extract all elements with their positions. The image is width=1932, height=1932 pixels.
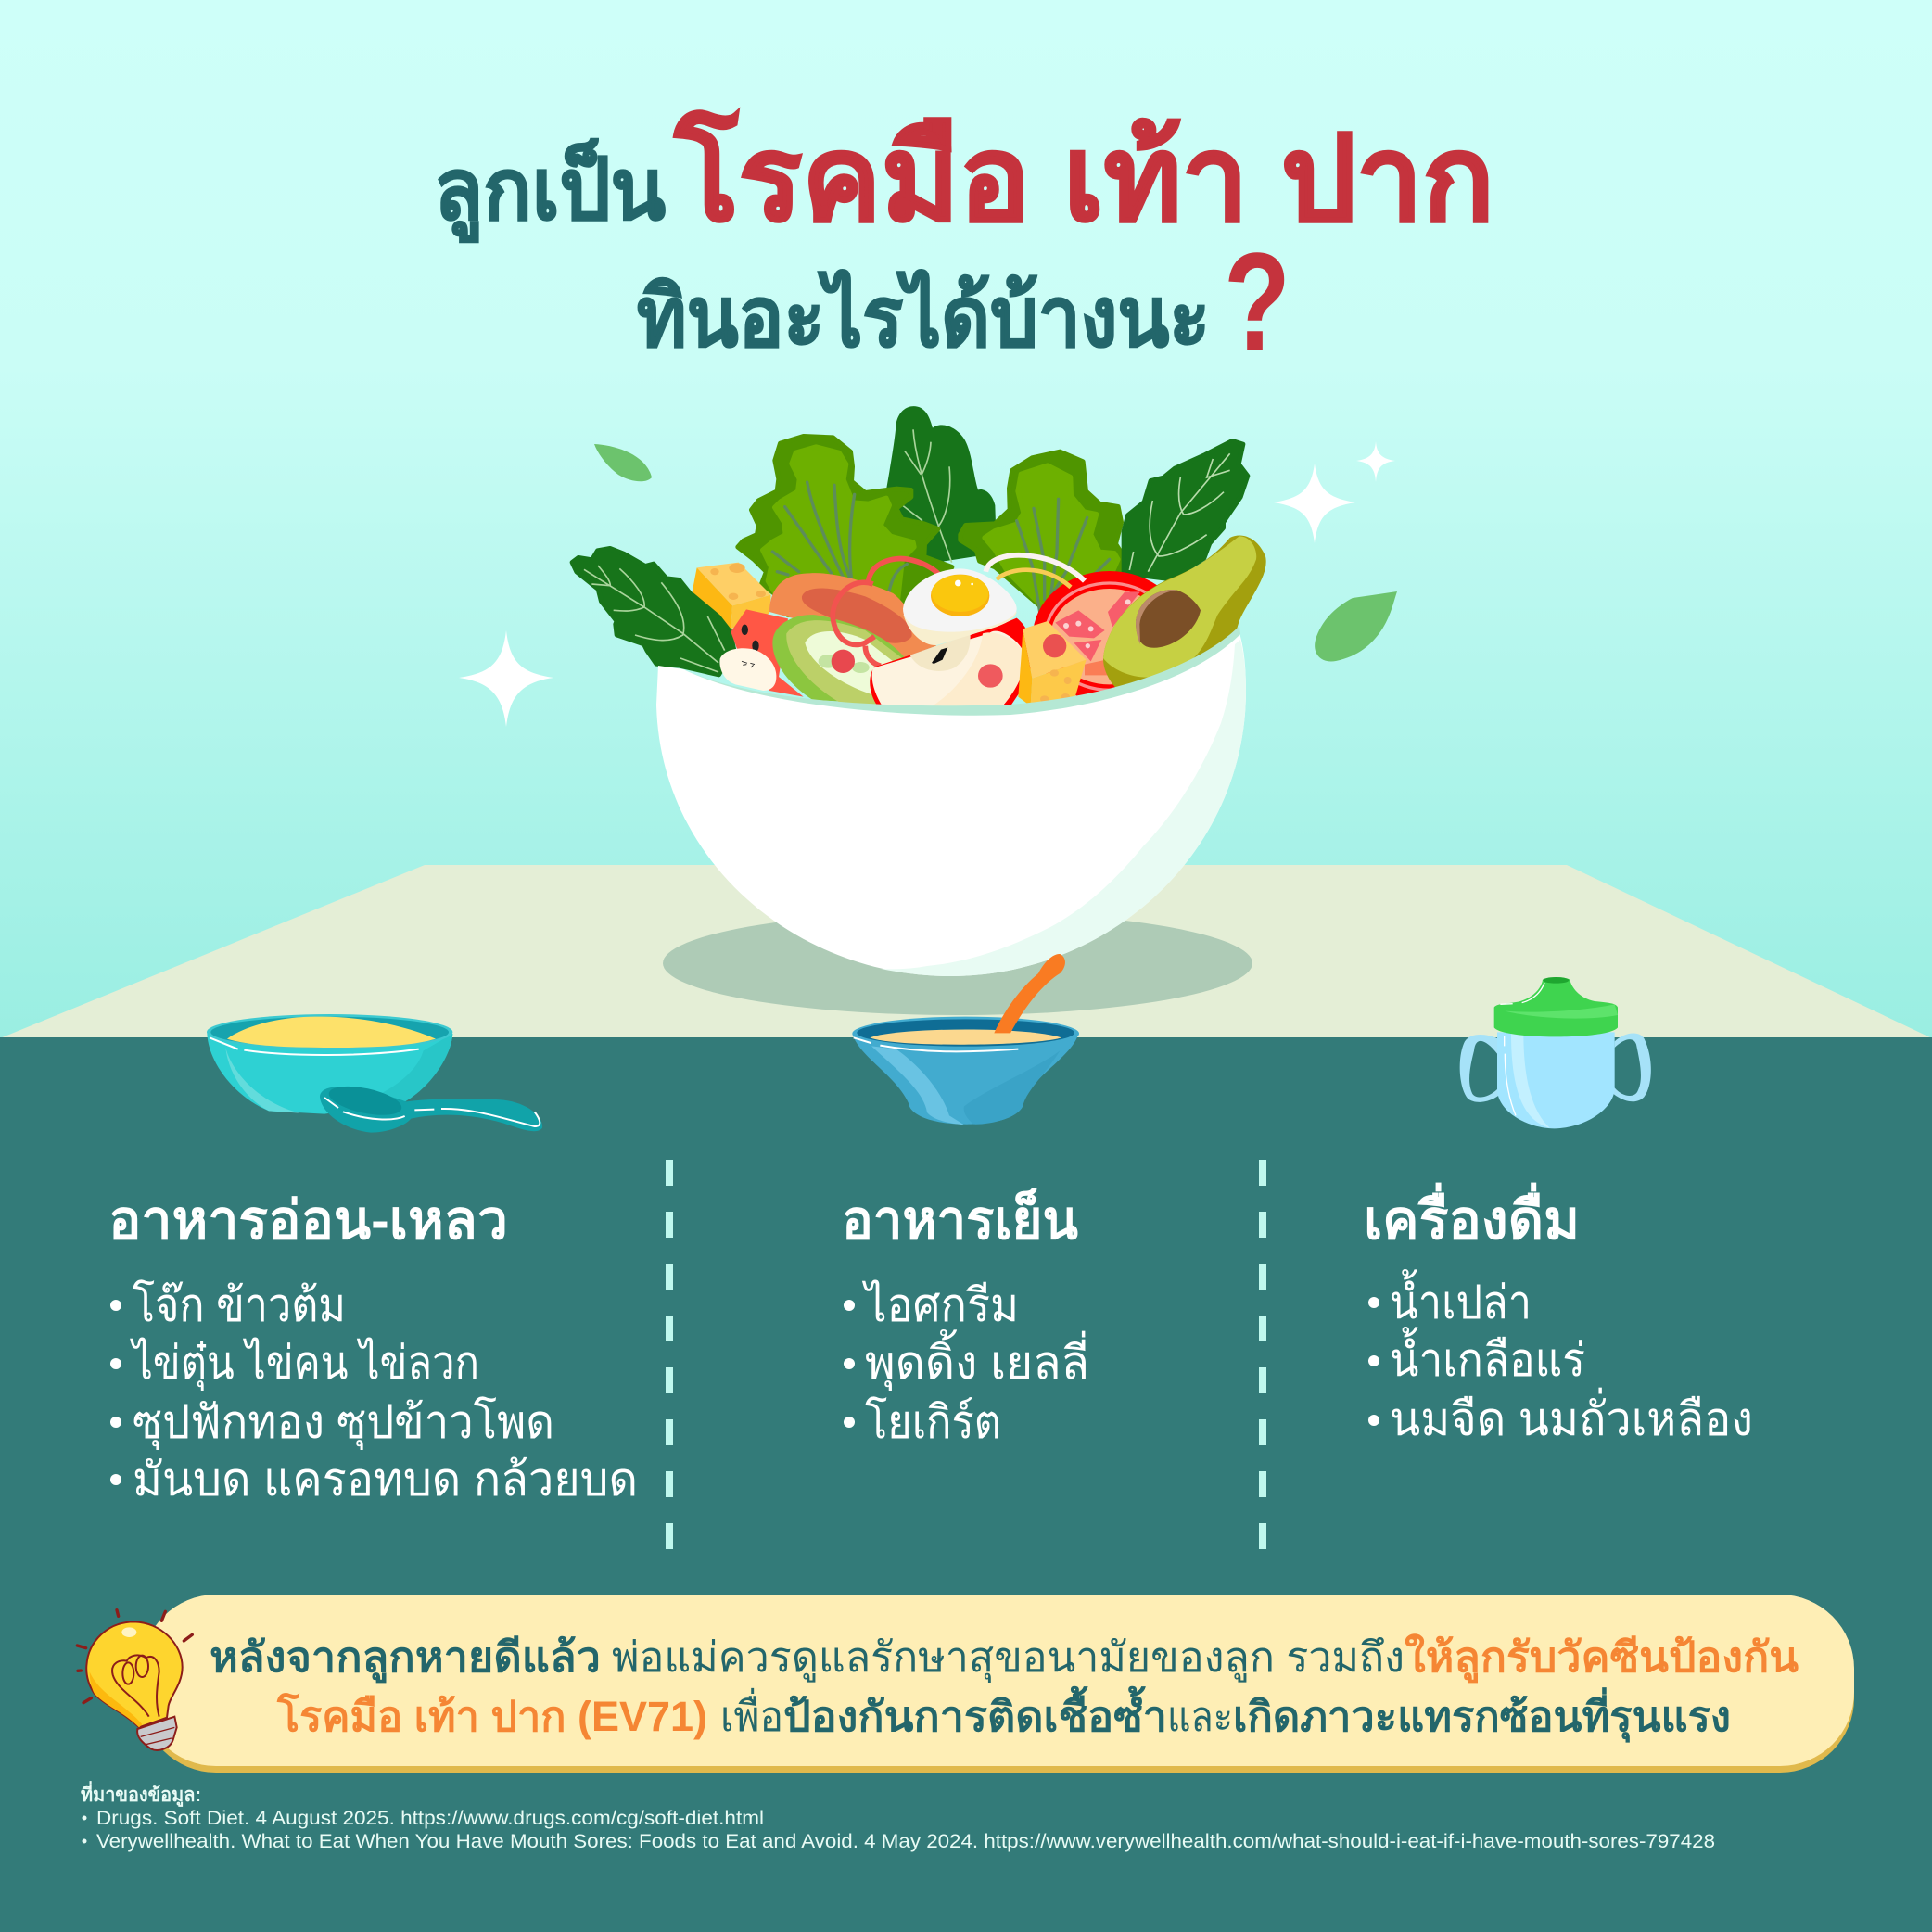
list: cold foods: โยเกิร์ต bbox=[865, 1396, 1001, 1448]
food: red onion ring bbox=[833, 559, 939, 666]
leaf: dark center bbox=[881, 406, 997, 568]
illustration: salad ingredients bbox=[572, 406, 1266, 711]
leaf: left dark bbox=[572, 549, 733, 675]
list: drinks: นมจืด นมถั่วเหลือง bbox=[1390, 1388, 1753, 1445]
icon: sparkle left bbox=[459, 630, 553, 727]
shadow under bowl bbox=[663, 911, 1252, 1015]
list: cold foods: ไอศกรีม bbox=[861, 1279, 1019, 1331]
spoon bbox=[994, 954, 1065, 1033]
list: soft and liquid foods: ซุปฟักทอง ซุปข้าวโพด bbox=[133, 1396, 554, 1450]
icon: sparkle right large bbox=[1274, 464, 1355, 543]
leaf: right dark bbox=[1124, 441, 1248, 579]
sources: Verywellhealth. What to Eat When You Have Mouth Sores: Foods to Eat and Avoid. 4 May 2024. https://www.verywellhealth.com/what-should-i-eat-if-i-have-mouth-sores-797428 bbox=[96, 1831, 1715, 1852]
callout: after recovery: พ่อแม่ควรดูแลรักษาสุขอนามัยของลูก รวมถึง bbox=[612, 1633, 1405, 1683]
list: drinks bbox=[1368, 1269, 1753, 1445]
title: ลูกเป็น bbox=[434, 138, 666, 243]
callout: after recovery: เกิดภาวะแทรกซ้อนที่รุนแรง bbox=[1233, 1687, 1731, 1743]
food: tomato bbox=[1033, 571, 1186, 702]
title bbox=[434, 109, 1494, 379]
heading: cold foods: อาหารเย็น bbox=[842, 1188, 1078, 1251]
callout: after recovery: ให้ลูกรับวัคซีนป้องกัน bbox=[1405, 1633, 1799, 1684]
callout: after recovery: ป้องกันการติดเชื้อซ้ำ bbox=[783, 1685, 1167, 1740]
title: ทินอะไรได้บ้างนะ bbox=[637, 270, 1210, 364]
rim and soup bbox=[852, 1017, 1079, 1050]
handles bbox=[1460, 1035, 1502, 1102]
food: cucumber bbox=[772, 615, 904, 705]
callout: after recovery: หลังจากลูกหายดีแล้ว bbox=[210, 1633, 601, 1684]
icon: floating leaf right bbox=[1315, 591, 1397, 661]
sources: Drugs. Soft Diet. 4 August 2025. https://www.drugs.com/cg/soft-diet.html bbox=[96, 1808, 764, 1829]
illustration: blue bowl with orange spoon bbox=[852, 954, 1079, 1125]
leaf: left lime bbox=[738, 437, 952, 615]
bowl bbox=[656, 626, 1246, 976]
list: drinks: น้ำเกลือแร่ bbox=[1390, 1327, 1585, 1386]
food: cheese cube front bbox=[1018, 621, 1087, 706]
food: apple bbox=[870, 618, 1033, 711]
food: watermelon bbox=[731, 609, 804, 697]
list: soft and liquid foods: ไข่ตุ๋น ไข่คน ไข่ลวก bbox=[130, 1337, 479, 1391]
list: cold foods: พุดดิ้ง เยลลี่ bbox=[865, 1329, 1089, 1391]
heading: drinks: เครื่องดื่ม bbox=[1364, 1182, 1580, 1251]
sources bbox=[81, 1780, 1715, 1852]
bowl rim bbox=[683, 626, 1240, 716]
food: avocado bbox=[1103, 535, 1266, 693]
list: drinks: น้ำเปล่า bbox=[1390, 1269, 1532, 1328]
title: ? bbox=[1224, 223, 1290, 379]
table top bbox=[0, 865, 1932, 1038]
table front bbox=[0, 1037, 1932, 1932]
list: cold foods bbox=[844, 1279, 1089, 1448]
illustration: sippy cup bbox=[1460, 977, 1651, 1128]
food: banana bbox=[719, 648, 776, 691]
callout: after recovery bbox=[142, 1595, 1854, 1773]
sources: ที่มาของข้อมูล: bbox=[81, 1780, 201, 1808]
icon: sparkle right small bbox=[1356, 441, 1395, 482]
callout: after recovery: และ bbox=[1167, 1693, 1233, 1740]
list: soft and liquid foods bbox=[110, 1279, 638, 1506]
bowl body bbox=[656, 633, 1246, 976]
stem sticking out under bowl rim bbox=[1007, 712, 1018, 726]
rim and food bbox=[207, 1014, 452, 1050]
icon: light bulb bbox=[77, 1610, 192, 1750]
cup body bbox=[1497, 1032, 1615, 1128]
callout: after recovery: เพื่อ bbox=[720, 1687, 783, 1740]
callout: after recovery: โรคมือ เท้า ปาก (EV71) bbox=[276, 1692, 707, 1740]
bowl right shade bbox=[881, 640, 1246, 976]
leaf: right lime bbox=[960, 451, 1121, 615]
bowl body bbox=[852, 1034, 1078, 1125]
green lid bbox=[1494, 977, 1618, 1036]
bowl body bbox=[207, 1034, 452, 1114]
list: soft and liquid foods: โจ๊ก ข้าวต้ม bbox=[133, 1279, 346, 1331]
background sky bbox=[0, 0, 1932, 1038]
list: soft and liquid foods: มันบด แครอทบด กล้วยบด bbox=[133, 1454, 638, 1506]
icon: floating leaf left bbox=[594, 444, 652, 481]
spoon bbox=[320, 1087, 542, 1133]
food: onion rings white and yellow bbox=[985, 555, 1085, 587]
illustration: left teal bowl and spoon bbox=[207, 1014, 542, 1133]
title: โรคมือ เท้า ปาก bbox=[673, 109, 1494, 246]
food: cheese cube back bbox=[693, 563, 771, 629]
heading: soft and liquid foods: อาหารอ่อน-เหลว bbox=[108, 1190, 508, 1251]
food: egg bbox=[903, 568, 1017, 645]
food: salmon bbox=[769, 573, 936, 661]
